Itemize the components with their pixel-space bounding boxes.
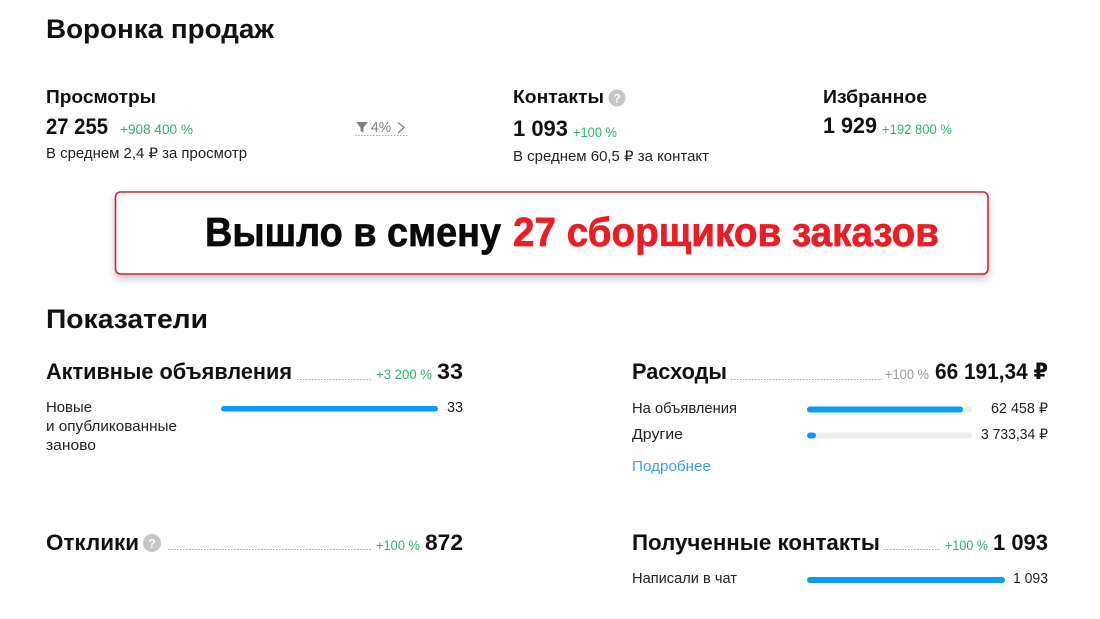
panel: responses: Отклики (46, 530, 139, 555)
panel: active listings: Новые (46, 400, 92, 416)
panel: active listings: 33 (447, 400, 463, 416)
panel: views metric: 27 255 (46, 114, 108, 139)
panel: active listings (46, 359, 463, 454)
bar: listing expenses (807, 406, 972, 412)
bar: chat contacts (807, 577, 1005, 583)
panel: contacts metric: ? (613, 92, 621, 106)
panel: active listings: 33 (437, 359, 463, 384)
panel: received contacts (632, 530, 1048, 587)
panel: contacts metric (513, 87, 709, 165)
heading: indicators: Показатели (46, 304, 208, 334)
panel: received contacts: 1 093 (993, 530, 1048, 555)
panel: expenses: На объявления (632, 401, 737, 417)
panel: expenses: Подробнее (632, 459, 711, 475)
panel: expenses: Другие (632, 427, 683, 443)
panel: responses: +100 % (376, 538, 420, 553)
panel: views metric: Просмотры (46, 87, 156, 107)
bar: new listings (221, 406, 438, 412)
panel: expenses: 66 191,34 ₽ (935, 359, 1048, 384)
panel: favourites metric: Избранное (823, 87, 927, 107)
panel: contacts metric: 1 093 (513, 116, 568, 141)
panel: expenses: +100 % (885, 367, 929, 382)
panel: views metric: +908 400 % (120, 122, 193, 137)
callout: 27 сборщиков заказов (513, 209, 939, 255)
panel: received contacts: +100 % (945, 538, 988, 553)
bar: other expenses (807, 432, 972, 438)
panel: received contacts: Полученные контакты (632, 530, 880, 555)
conversion indicator (355, 119, 408, 136)
panel: responses: 872 (425, 530, 463, 555)
panel: contacts metric: В среднем 60,5 ₽ за контакт (513, 149, 709, 165)
panel: favourites metric: 1 929 (823, 113, 877, 138)
heading: sales funnel: Воронка продаж (46, 14, 275, 44)
panel: views metric (46, 87, 247, 162)
panel: responses (46, 530, 463, 555)
panel: received contacts: 1 093 (1013, 571, 1048, 587)
panel: views metric: В среднем 2,4 ₽ за просмотр (46, 146, 247, 162)
callout: Вышло в смену (205, 209, 501, 255)
panel: favourites metric (823, 87, 952, 138)
panel: expenses: 3 733,34 ₽ (981, 427, 1048, 443)
panel: expenses: 62 458 ₽ (991, 401, 1048, 417)
panel: contacts metric: Контакты (513, 87, 604, 107)
panel: responses: ? (148, 536, 156, 550)
panel: active listings: Активные объявления (46, 359, 292, 384)
panel: expenses (632, 359, 1048, 475)
callout (116, 192, 988, 274)
panel: received contacts: Написали в чат (632, 571, 737, 587)
panel: active listings: и опубликованные (46, 419, 177, 435)
panel: active listings: +3 200 % (376, 367, 432, 382)
conversion indicator: 4% (371, 119, 391, 136)
panel: active listings: заново (46, 438, 96, 454)
panel: favourites metric: +192 800 % (882, 122, 952, 137)
panel: expenses: Расходы (632, 359, 727, 384)
panel: contacts metric: +100 % (573, 125, 617, 140)
